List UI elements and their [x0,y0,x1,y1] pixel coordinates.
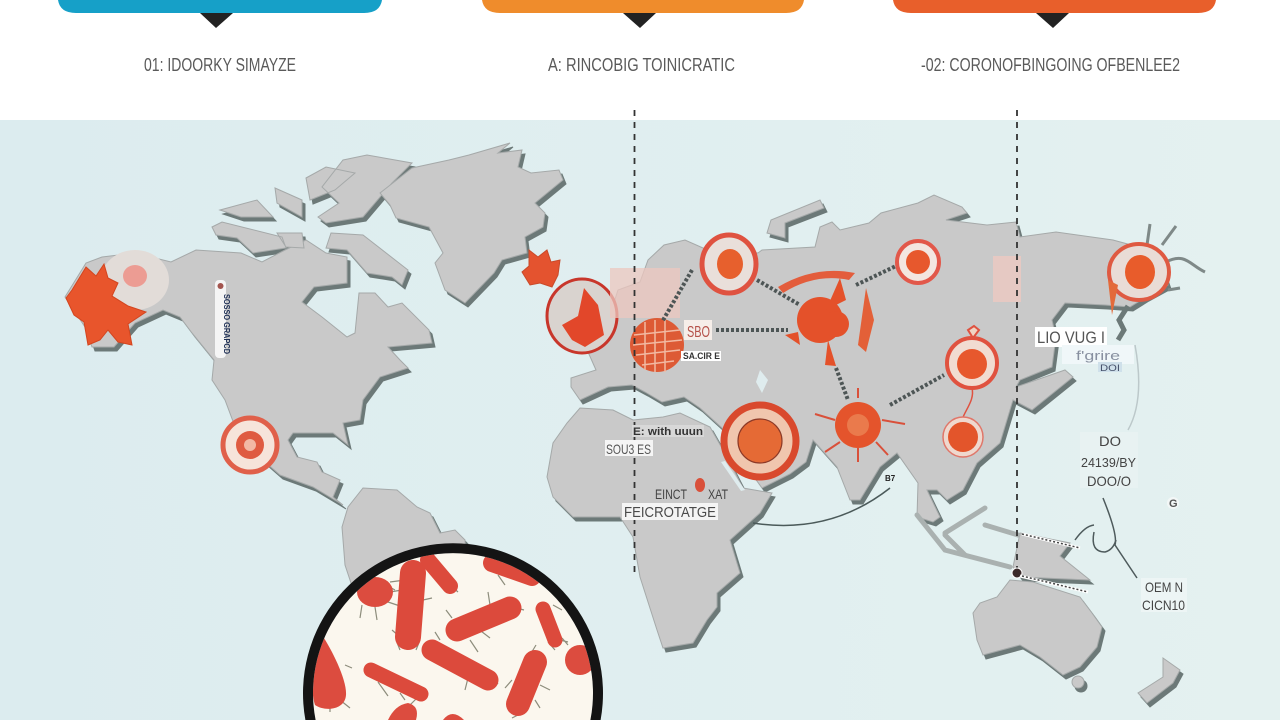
land: Australia [973,580,1102,675]
label: East Asia callout: DOI [1100,363,1120,373]
hotspot: Arabia large ring [724,405,796,477]
dotted routes: Australia and Papua [1020,534,1088,592]
hotspot: spiky India virus [815,388,905,462]
route dot: north Australia [1012,568,1022,578]
hotspot: South China ring [943,417,983,457]
faint pink region over Europe [610,268,680,318]
hotspot: Mexico ring marker [223,418,277,472]
label: Indian Ocean B7: B7 [885,474,896,483]
panel: blue banner [58,0,382,28]
land: Africa [547,408,772,648]
land: Arctic islands [212,155,412,285]
land: Novaya Zemlya [767,200,824,238]
land: New Zealand [1138,658,1180,703]
label: Pacific DO block [1080,432,1138,489]
bacteria cell spikes [330,562,568,718]
land: Kamchatka coast [1118,306,1128,340]
label: East Asia callout [1035,327,1134,373]
label: Ocean block: CICN10 [1142,597,1185,613]
land: South America [342,488,470,610]
label: Europe SBO: SA.CIR E [683,351,720,361]
hotspot: Atlantic splat [522,250,560,287]
magnifier: bacteria close-up [303,543,603,720]
hotspot: striped Europe disc [630,318,684,372]
label: North Africa [605,425,704,457]
land: Papua and northern islands [1013,533,1090,580]
label: Pacific DO block: 24139/BY [1081,455,1136,470]
hotspot: Alaska red splat [66,264,146,345]
label: Pacific DO block: DO [1099,433,1121,449]
label: Pacific DO block: DOO/O [1087,473,1131,489]
label: vertical pill on North America [215,280,231,358]
hotspot: UK ring [547,279,617,353]
hotspot: red sliver [858,288,874,352]
hotspot: Far East ring with antennae [1108,224,1205,315]
dashed guide line left [634,110,636,575]
bacteria rods [357,577,393,607]
heading: column one: 01: IDOORKY SIMAYZE [144,55,296,75]
heading: column three: -02: CORONOFBINGOING OFBENLEE2 [921,55,1180,75]
icon: small Pacific marker [1167,497,1179,510]
label: Central Africa: EINCT [655,486,687,502]
icon: small Pacific marker: G [1169,498,1178,510]
label: Central Africa: FEICROTATGE [624,504,716,521]
land: North America [65,240,432,505]
dashed guide line right [1016,110,1018,572]
hotspot: China ring with tail [947,326,997,420]
label: vertical pill on North America: SOSSO GRAPCD [222,294,231,354]
dashed routes between hotspots [662,266,944,405]
callout leader lines [1075,345,1139,578]
label: East Asia callout: f'grire [1076,348,1120,363]
label: Ocean block: OEM N [1145,579,1183,595]
world map landmasses [65,143,1180,703]
land: Tasmania [1072,676,1084,688]
label: North Africa: E: with uuun [633,426,703,438]
faint pink region in Siberia [993,256,1021,302]
label: North Africa: SOU3 ES [606,441,651,457]
hotspot: northern Europe ring [702,235,756,293]
hotspot: Siberia ring [897,241,939,283]
faded Alaska highlight [101,250,169,310]
label: Central Africa [622,478,728,521]
label: East Asia callout: LIO VUG I [1037,328,1105,347]
heading: column two: A: RINCOBIG TOINICRATIC [548,55,735,75]
label: Ocean block [1141,578,1187,613]
inland seas [721,370,768,491]
panel: red-orange banner [893,0,1216,28]
label: Europe SBO [681,320,721,361]
land: Eurasia [571,195,1168,522]
label: Central Africa: XAT [708,486,728,502]
panel: orange banner [482,0,804,28]
land: Southeast Asian island lines [917,508,1018,567]
land: Greenland [380,143,563,303]
label: Europe SBO: SBO [687,324,710,341]
curved arc across Indian Ocean [753,488,890,525]
hotspot: Central Asia blob [778,271,855,366]
